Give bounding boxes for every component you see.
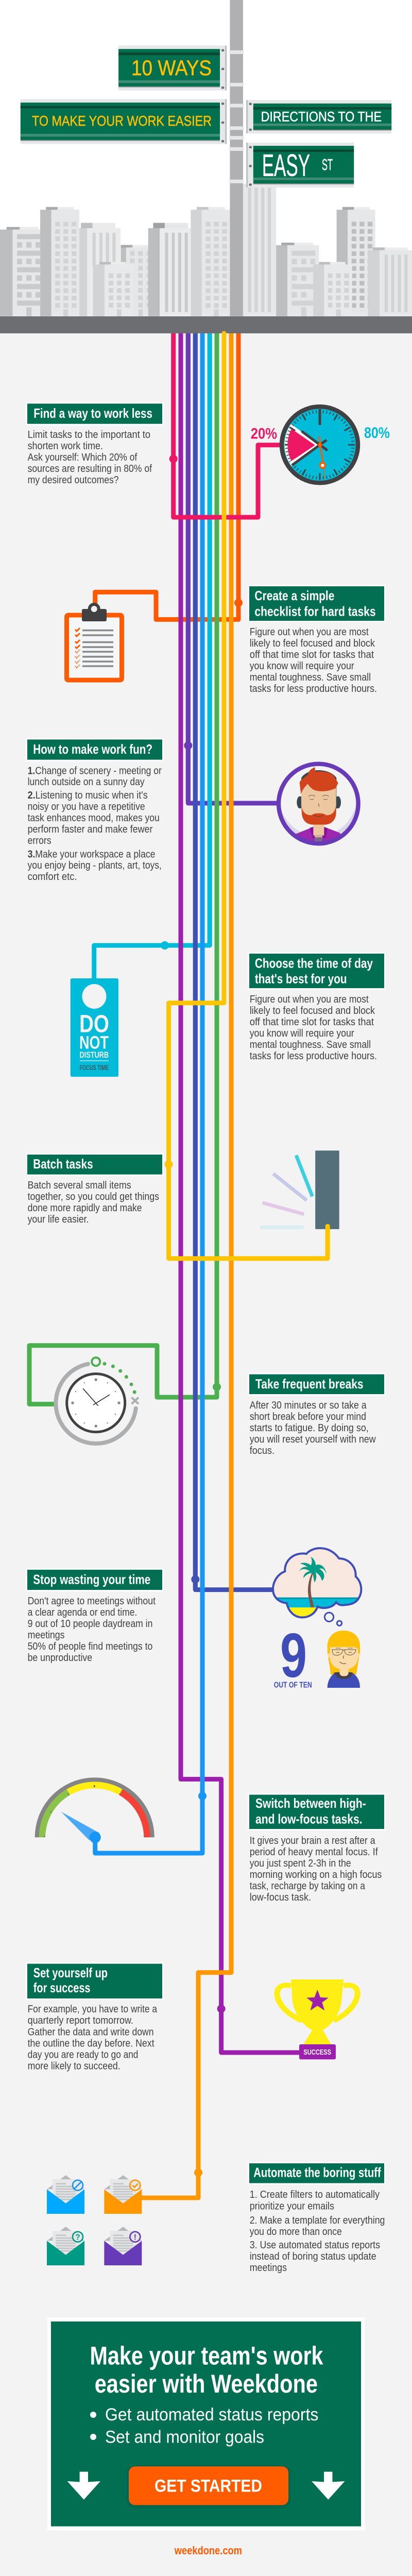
icon: gauge: [35, 1777, 154, 1843]
heading: [26, 402, 164, 426]
body text: you know will require your: [250, 660, 354, 672]
arrow: left: [67, 2472, 100, 2500]
building D: [93, 262, 134, 316]
body text: prioritize your emails: [250, 2200, 334, 2212]
heading: [248, 2162, 386, 2184]
body text: sources are resulting in 80% of: [28, 463, 152, 474]
heading: checklist for hard tasks: [254, 603, 376, 619]
body text: [250, 1835, 382, 1903]
route: blue line: [95, 333, 207, 1853]
body text: low-focus task.: [250, 1892, 311, 1903]
heading: Set yourself up: [33, 1965, 108, 1980]
icon: do not disturb door hanger: DISTURB: [79, 1050, 109, 1060]
icon: do not disturb door hanger: [71, 978, 118, 1077]
icon: man with headphones: [278, 758, 359, 846]
body text: more likely to succeed.: [28, 2061, 121, 2072]
body text: mental toughness. Save small: [250, 672, 371, 683]
body text: Limit tasks to the important to: [28, 429, 150, 440]
heading: and low-focus tasks.: [255, 1811, 363, 1827]
building A: [0, 227, 40, 316]
panel: switch between high and low focus: [248, 1793, 386, 1903]
icon: daydream cloud with palm tree: [271, 1548, 362, 1625]
body text: After 30 minutes or so take a: [250, 1400, 367, 1411]
body text: [250, 994, 377, 1062]
route: yellow line: [165, 333, 328, 1259]
skyline of buildings: [0, 184, 412, 316]
building L: [368, 247, 412, 316]
sign: make your work easier plate: [21, 99, 227, 144]
sign: easy st plate: [246, 143, 354, 188]
panel: take frequent breaks: [248, 1373, 386, 1456]
title: 10 ways: 10 WAYS: [131, 56, 212, 80]
body text: morning working on a high focus: [250, 1869, 382, 1880]
icon: teal question envelope: [47, 2227, 84, 2265]
icon: trophy: SUCCESS: [303, 2048, 331, 2057]
icon: do not disturb door hanger: DO: [79, 1011, 109, 1038]
pole clamps: [229, 50, 244, 183]
panel: automate the boring stuff: [248, 2162, 386, 2274]
heading: How to make work fun?: [33, 741, 152, 757]
heading: [26, 738, 164, 761]
body text: perform faster and make fewer: [28, 824, 153, 835]
building B: [40, 207, 79, 316]
body text: 1.Change of scenery - meeting or: [28, 765, 162, 776]
body text: likely to feel focused and block: [250, 638, 375, 649]
body text: 3.Make your workspace a place: [28, 849, 155, 860]
body text: For example, you have to write a: [28, 2004, 158, 2015]
route: pink line: [169, 333, 288, 517]
icon: trophy: [277, 1979, 357, 2059]
bullet list: Set and monitor goals: [105, 2428, 264, 2447]
icons: email envelopes: [47, 2175, 142, 2265]
body text: off that time slot for tasks that: [250, 649, 374, 660]
title: directions to the: DIRECTIONS TO THE: [261, 109, 382, 125]
panel: stop wasting your time: [26, 1568, 164, 1664]
icon: blue blocked envelope: [47, 2175, 84, 2214]
route: deep orange line: [95, 333, 243, 619]
icon: do not disturb door hanger: NOT: [79, 1033, 109, 1053]
body text: comfort etc.: [28, 871, 77, 883]
body text: you just spent 2-3h in the: [250, 1858, 351, 1869]
body text: you will reset yourself with new: [250, 1434, 376, 1445]
heading: [248, 1793, 386, 1831]
body text: tasks for less productive hours.: [250, 683, 377, 694]
icon: woman with glasses: [328, 1631, 360, 1688]
heading: for success: [33, 1980, 91, 1995]
body text: short break before your mind: [250, 1411, 366, 1422]
panel: call to action: [47, 2317, 365, 2531]
footer: weekdone.com: weekdone.com: [174, 2544, 242, 2557]
body text: quarterly report tomorrow.: [28, 2015, 133, 2026]
body text: 1. Create filters to automatically: [250, 2189, 380, 2200]
building K: [313, 262, 352, 316]
body text: day you are ready to go and: [28, 2049, 138, 2061]
body text: starts to fatigue. By doing so,: [250, 1422, 369, 1434]
building J: [337, 207, 375, 316]
icon: clipboard: [67, 603, 122, 680]
body text: instead of boring status update: [250, 2251, 376, 2262]
heading: [248, 1373, 386, 1396]
body text: you know will require your: [250, 1028, 354, 1039]
body text: errors: [28, 835, 52, 846]
body text: off that time slot for tasks that: [250, 1016, 374, 1028]
route: indigo line: [191, 333, 274, 1590]
body text: 9 out of 10 people daydream in: [28, 1618, 152, 1630]
bullet list: [90, 2405, 318, 2447]
body text: period of heavy mental focus. If: [250, 1846, 378, 1858]
body text: 2.Listening to music when it's: [28, 790, 148, 801]
icon: orange checked envelope: [104, 2175, 142, 2214]
panel: set yourself up for success: [26, 1962, 164, 2072]
panel: simple checklist: [248, 585, 386, 694]
stat: 9 out of ten: 9: [280, 1620, 307, 1690]
body text: tasks for less productive hours.: [250, 1050, 377, 1062]
body text: [28, 1596, 156, 1664]
body text: a clear agenda or end time.: [28, 1607, 137, 1618]
heading: [26, 1568, 164, 1591]
heading: [90, 2342, 323, 2398]
heading: [248, 952, 386, 989]
body text: Ask yourself: Which 20% of: [28, 452, 138, 463]
body text: you do more than once: [250, 2226, 342, 2238]
heading: Create a simple: [254, 588, 334, 603]
icon: 20/80 clock: [282, 406, 358, 483]
body text: [250, 1400, 376, 1456]
heading: Take frequent breaks: [255, 1376, 364, 1392]
icon: batch tasks block with motion lines: [260, 1150, 339, 1258]
body text: It gives your brain a rest after a: [250, 1835, 375, 1846]
body text: my desired outcomes?: [28, 474, 119, 486]
building I: [276, 243, 319, 316]
body text: 3. Use automated status reports: [250, 2240, 380, 2251]
sign: directions plate: [246, 100, 391, 133]
heading: [27, 1153, 164, 1176]
body text: you enjoy being - plants, art, toys,: [28, 860, 162, 871]
body text: done more rapidly and make: [28, 1202, 142, 1214]
body text: meetings: [250, 2262, 287, 2274]
road: [0, 316, 412, 333]
heading: [248, 585, 386, 622]
body text: mental toughness. Save small: [250, 1039, 371, 1050]
body text: your life easier.: [28, 1214, 89, 1225]
body text: Don't agree to meetings without: [28, 1596, 156, 1607]
body text: meetings: [28, 1630, 65, 1641]
body text: [28, 765, 162, 883]
body text: 50% of people find meetings to: [28, 1641, 152, 1652]
route: green line: [29, 333, 221, 1404]
heading: Switch between high-: [255, 1795, 366, 1811]
heading: that's best for you: [255, 971, 347, 986]
sign: 10 ways plate: [118, 45, 227, 90]
body text: task enhances mood, makes you: [28, 812, 160, 824]
label: 20%: 20%: [251, 426, 277, 443]
heading: Batch tasks: [33, 1156, 93, 1172]
body text: shorten work time.: [28, 440, 103, 452]
body text: likely to feel focused and block: [250, 1005, 375, 1016]
icon: purple alert envelope: [104, 2227, 142, 2265]
building C: [79, 223, 121, 316]
icon: purple alert envelope: !: [134, 2233, 136, 2242]
building E: [121, 245, 154, 316]
heading: Make your team's work: [90, 2342, 323, 2370]
body text: Batch several small items: [28, 1180, 131, 1191]
panel: batch tasks: [27, 1153, 164, 1225]
icon: teal question envelope: ?: [75, 2233, 80, 2242]
title: easy: EASY: [262, 148, 310, 182]
title: st: ST: [322, 156, 333, 174]
body text: [250, 626, 377, 694]
body text: be unproductive: [28, 1652, 92, 1664]
panel: how to make work fun: [26, 738, 164, 883]
icon: break clock: [56, 1358, 139, 1444]
body text: Figure out when you are most: [250, 994, 369, 1005]
body text: the outline the day before. Next: [28, 2038, 154, 2049]
heading: Choose the time of day: [255, 955, 373, 971]
bullet list: Get automated status reports: [105, 2405, 318, 2425]
body text: focus.: [250, 1445, 274, 1456]
body text: [28, 2004, 158, 2072]
sign pole: [21, 0, 391, 316]
body text: [28, 1180, 159, 1225]
building H: [243, 184, 276, 316]
heading: [26, 1962, 164, 2000]
rainbow trunk: [181, 333, 238, 1853]
title: to make your work easier: TO MAKE YOUR WORK EASIER: [32, 113, 212, 129]
body text: 2. Make a template for everything: [250, 2215, 385, 2226]
building F: [148, 223, 191, 316]
heading: Stop wasting your time: [33, 1572, 150, 1587]
body text: task, recharge by taking on a: [250, 1880, 366, 1892]
heading: Find a way to work less: [33, 405, 152, 421]
body text: [250, 2189, 385, 2274]
body text: [28, 429, 152, 486]
stat: 9 out of ten: OUT OF TEN: [274, 1681, 312, 1690]
button: get started: [127, 2465, 290, 2508]
route: cyan line: [94, 333, 210, 979]
label: 80%: 80%: [364, 425, 390, 442]
button: get started: GET STARTED: [154, 2476, 262, 2496]
heading: easier with Weekdone: [95, 2369, 318, 2398]
route: deep purple line: [184, 333, 278, 803]
route: orange line: [140, 333, 231, 2198]
panel: choose the time of day: [248, 952, 386, 1062]
icon: do not disturb door hanger: FOCUS TIME: [79, 1064, 109, 1072]
body text: together, so you could get things: [28, 1191, 159, 1202]
body text: Gather the data and write down: [28, 2026, 153, 2038]
route: purple line: [181, 333, 301, 2053]
body text: Figure out when you are most: [250, 626, 369, 638]
body text: noisy or you have a repetitive: [28, 801, 145, 812]
arrow: right: [312, 2472, 345, 2500]
panel: find a way to work less: [26, 402, 164, 486]
building G: [191, 207, 230, 316]
body text: lunch outside on a sunny day: [28, 776, 145, 788]
